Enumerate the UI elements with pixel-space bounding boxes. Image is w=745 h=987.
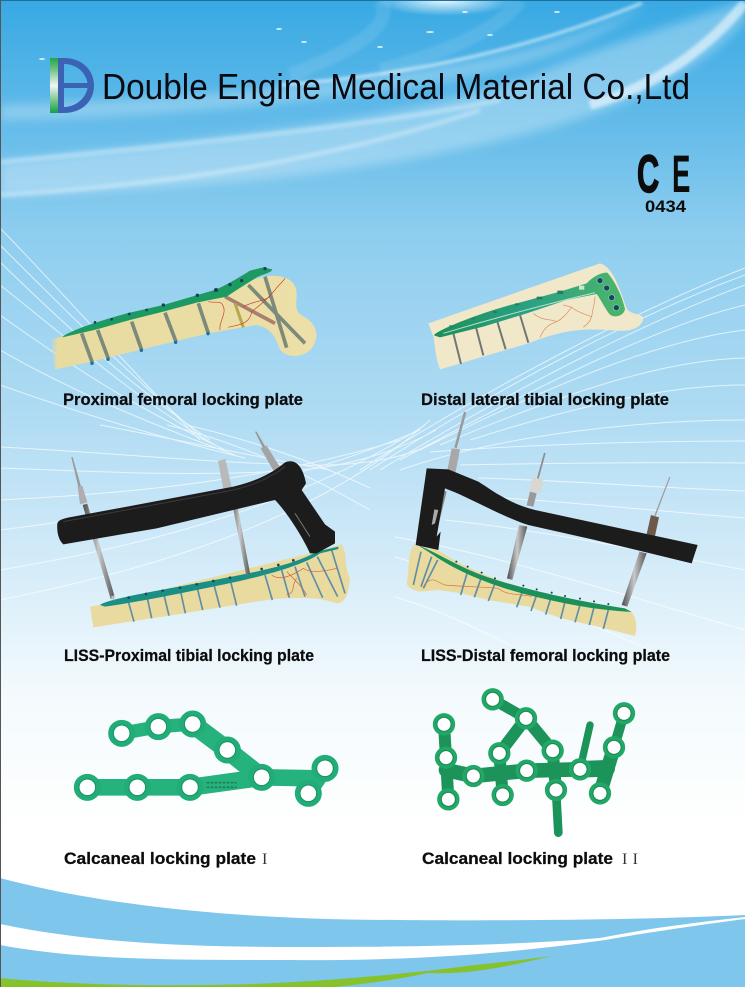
- caption: LISS proximal tibial: LISS-Proximal tibial locking plate: [64, 646, 314, 665]
- top light swooshes: [0, 0, 745, 196]
- CE number: 0434: [645, 197, 687, 216]
- bottom waves: [0, 878, 745, 987]
- rods: [507, 525, 527, 580]
- caption: calcaneal II: Calcaneal locking plate: [422, 849, 613, 868]
- background mesh lines: [0, 228, 745, 650]
- green wave: [0, 956, 552, 987]
- CE mark: [637, 144, 690, 216]
- illustration: proximal femoral plate: [50, 267, 316, 369]
- aiming arm: [57, 461, 335, 553]
- caption: distal lateral tibial: Distal lateral tibial locking plate: [421, 390, 669, 409]
- company title: Double Engine Medical Material Co.,Ltd: [102, 66, 690, 107]
- caption: calcaneal I: I: [262, 851, 267, 868]
- caption: calcaneal II: II: [622, 851, 638, 868]
- illustration: distal lateral tibial plate: [428, 263, 643, 369]
- rods: [83, 504, 115, 599]
- CE mark: C: [637, 146, 659, 204]
- caption: LISS distal femoral: LISS-Distal femoral locking plate: [421, 646, 670, 665]
- illustration: LISS distal femoral: [407, 412, 698, 636]
- illustration: LISS proximal tibial: [57, 432, 350, 627]
- illustration: calcaneal plate I: [77, 713, 336, 804]
- logo: [50, 58, 94, 113]
- caption: proximal femoral: Proximal femoral locking plate: [63, 390, 303, 409]
- caption: calcaneal I: Calcaneal locking plate: [64, 849, 256, 868]
- illustration: calcaneal plate II: [435, 690, 633, 833]
- aiming arm: [416, 468, 698, 563]
- CE mark: E: [672, 144, 690, 203]
